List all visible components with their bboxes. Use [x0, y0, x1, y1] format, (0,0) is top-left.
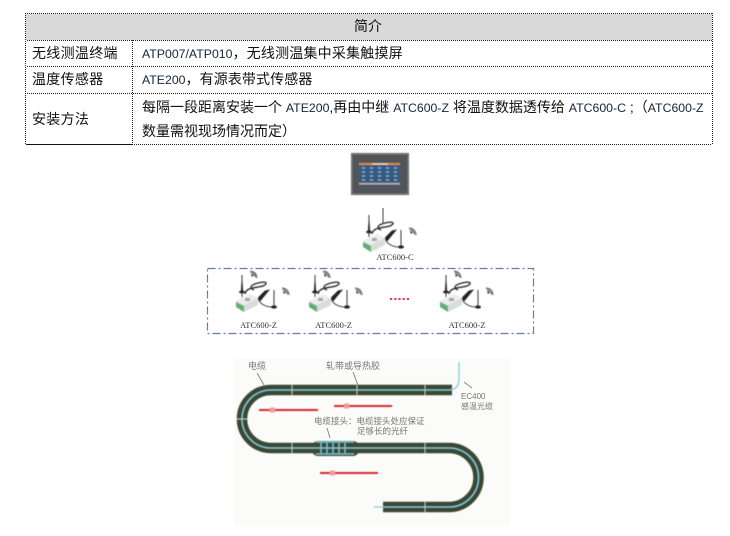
label: ATC600-Z 3: ATC600-Z: [449, 320, 485, 330]
device: ATC600-Z 3: [440, 271, 493, 330]
label: EC400 fibre: EC400: [461, 392, 485, 401]
row label: temperature sensor: 温度传感器: [32, 71, 104, 87]
table header: 简介: [354, 18, 382, 34]
row text: installation line 2: 数量需视现场情况而定）: [142, 123, 296, 139]
label: ATC600-Z 1: ATC600-Z: [240, 320, 277, 330]
cable ties: [259, 406, 392, 473]
row text: installation line 1: 每隔一段距离安装一个 ATE200,再由中继 ATC600-Z 将温度数据透传给 ATC600-C ;（ATC600-Z: [142, 99, 704, 115]
row label: wireless terminal: 无线测温终端: [32, 45, 118, 61]
label: cable: 电缆: [248, 360, 266, 371]
label: EC400 fibre: 感温光缆: [461, 401, 493, 411]
label: cable joint note: 电缆接头：电缆接头处应保证: [314, 416, 425, 426]
dashed box: relay group: [208, 268, 534, 334]
icon: touch screen: [351, 153, 409, 195]
label: ATC600-Z 2: ATC600-Z: [315, 320, 352, 330]
row text: temperature sensor: ATE200，有源表带式传感器: [142, 71, 312, 87]
label: cable joint note: 足够长的光纤: [357, 426, 409, 436]
device: ATC600-Z 1: [236, 271, 289, 330]
table header: [25, 13, 713, 40]
table: introduction: [25, 13, 713, 145]
fibre: [242, 362, 478, 507]
leader lines: [257, 372, 472, 438]
connector line: [382, 208, 384, 223]
label: ties or thermal glue: 轧带或导热胶: [326, 360, 380, 371]
row label: installation method: 安装方法: [32, 111, 89, 127]
label: ATC600-C: ATC600-C: [376, 252, 414, 262]
device: ATC600-Z 2: [309, 271, 362, 330]
ellipsis: red dots: [390, 298, 411, 300]
cable joint: [312, 441, 359, 456]
row text: wireless terminal: ATP007/ATP010，无线测温集中采集触摸屏: [142, 45, 403, 61]
image background: [234, 358, 510, 526]
cable: [237, 362, 478, 512]
device: ATC600-C: [363, 215, 416, 262]
